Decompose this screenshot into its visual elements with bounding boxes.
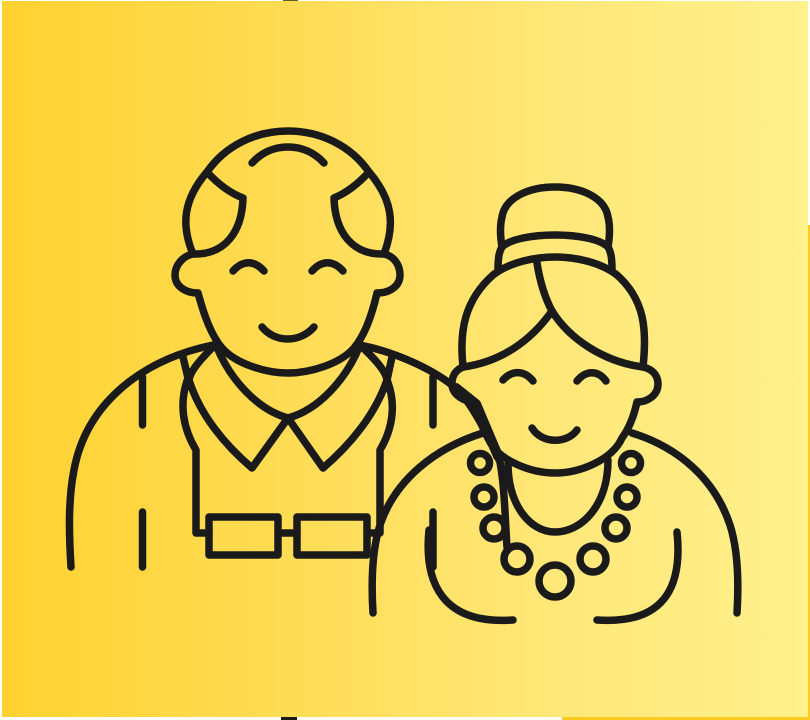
woman necklace [470,454,490,472]
man hair right [334,172,384,254]
man eyes [233,263,343,271]
woman eyes [503,373,606,381]
man head and ears [175,131,400,373]
woman hair bun [500,187,610,247]
icon: elderly woman [372,187,738,620]
woman smile [532,428,577,440]
woman hair parting [537,263,643,367]
icon: elderly man [69,131,507,567]
man cardigan edges [183,357,209,533]
man collar [216,345,360,418]
man forehead line [252,147,324,163]
woman arms [428,530,678,620]
man shoulders [69,345,507,567]
man hair left [193,172,243,254]
man glasses [209,517,278,555]
woman neckline [508,460,608,532]
man smile [262,327,314,339]
woman head [452,257,658,473]
man shoulder overlap [456,388,498,456]
man cardigan stripes [142,377,433,567]
woman body [372,433,738,613]
